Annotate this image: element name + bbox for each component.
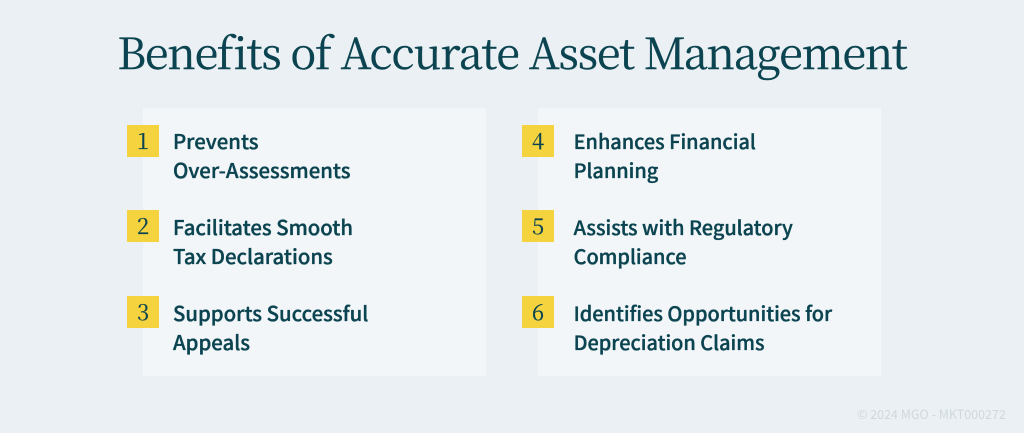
benefit 1 text — [173, 125, 351, 184]
benefit 6 text: Depreciation Claims — [574, 327, 765, 356]
benefit 3 text: Appeals — [173, 326, 250, 356]
benefit 5 text: Assists with Regulatory — [574, 212, 793, 241]
benefit 4 text — [574, 126, 756, 184]
benefit 3 text: Supports Successful — [173, 297, 368, 327]
benefit 2 text — [173, 211, 353, 270]
panel: right benefits — [538, 108, 881, 376]
number badge 4: 4 — [532, 125, 544, 156]
benefit 4 text: Enhances Financial — [574, 126, 756, 155]
number badge 2 — [127, 210, 159, 242]
benefit 5 text: Compliance — [574, 241, 686, 270]
benefit 5 text — [573, 212, 793, 270]
number badge 5: 5 — [532, 210, 544, 241]
benefit 2 text: Tax Declarations — [173, 240, 333, 270]
number badge 1 — [127, 125, 159, 157]
number badge 4 — [522, 125, 554, 157]
number badge 3 — [127, 296, 159, 328]
benefit 1 text: Over-Assessments — [173, 154, 351, 184]
number badge 6: 6 — [532, 296, 544, 327]
number badge 2: 2 — [137, 210, 149, 241]
benefit 2 text: Facilitates Smooth — [173, 211, 353, 241]
benefit 6 text — [574, 298, 832, 356]
title: Benefits of Accurate Asset Management — [117, 21, 907, 82]
panel: left benefits — [143, 108, 486, 376]
benefit 1 text: Prevents — [173, 125, 259, 155]
benefit 6 text: Identifies Opportunities for — [574, 298, 832, 327]
number badge 6 — [522, 296, 554, 328]
benefit 4 text: Planning — [574, 155, 658, 184]
number badge 1: 1 — [137, 125, 149, 156]
benefit 3 text — [172, 297, 368, 356]
number badge 3: 3 — [137, 296, 149, 327]
number badge 5 — [522, 210, 554, 242]
copyright footer: © 2024 MGO - MKT000272 — [857, 404, 1006, 423]
